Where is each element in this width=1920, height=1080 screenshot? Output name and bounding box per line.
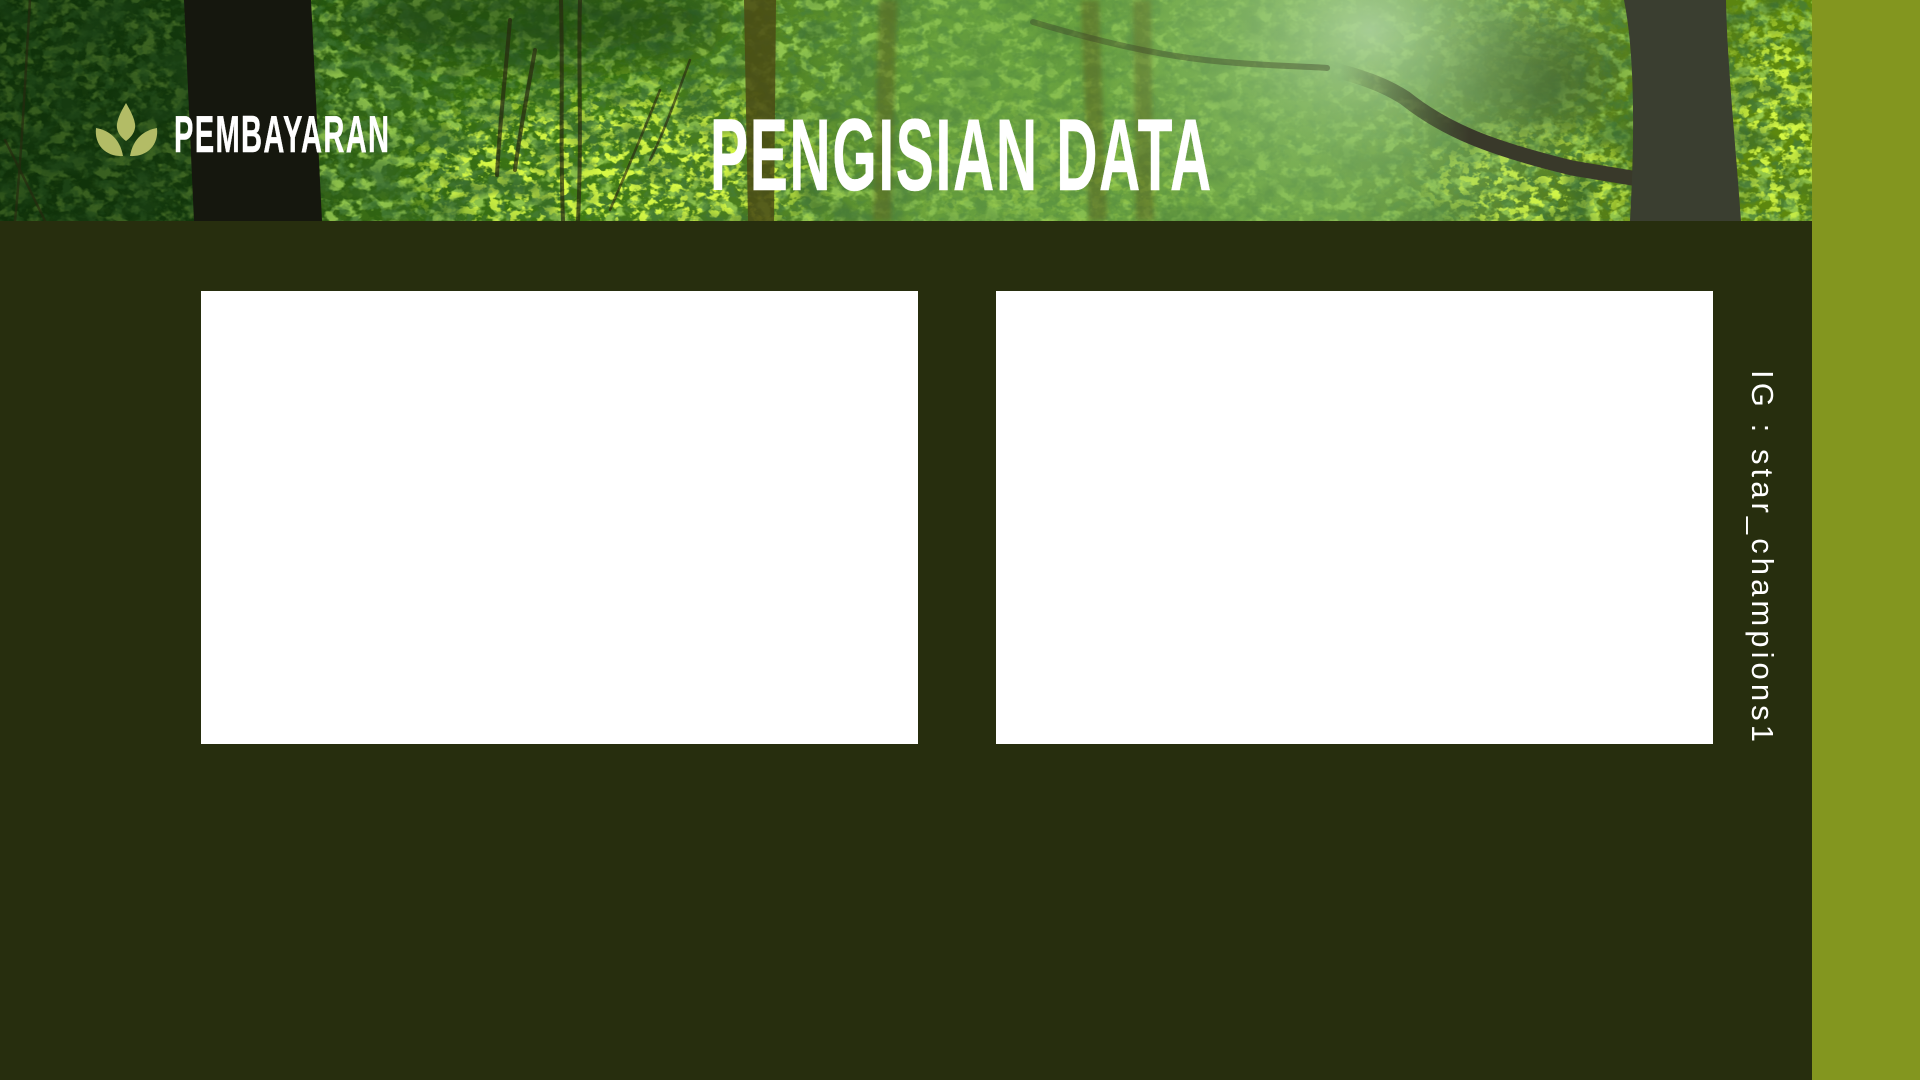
shaded left foliage: [0, 0, 340, 221]
leaf shadows: [0, 0, 1812, 221]
sunlight haze: [1080, 0, 1660, 270]
shaded right canopy: [1430, 25, 1610, 125]
hazy overlay over centre: [760, 0, 1540, 221]
panel: right white box: [996, 291, 1713, 744]
thin tree trunks and branches: [5, 0, 690, 221]
leaf texture mid: [0, 0, 1812, 221]
title: pengisian data: PENGISIAN DATA: [710, 97, 1211, 212]
tree trunk: centre: [744, 0, 776, 221]
panel: left white box: [201, 291, 918, 744]
heading: pembayaran: PEMBAYARAN: [174, 105, 389, 163]
leaf texture bright: [312, 0, 1812, 221]
tree branch: [1033, 22, 1632, 178]
icon: leaves: [96, 103, 157, 156]
tree trunk: left dark: [184, 0, 322, 221]
tree trunk: right: [1624, 0, 1741, 221]
leaf texture dark: [0, 0, 1812, 221]
sidebar: olive strip: [1812, 0, 1920, 1080]
forest base colour: [0, 0, 1812, 221]
banner: forest photo with titles: [0, 0, 1812, 221]
shaded upper canopy: [330, 0, 730, 65]
hazy distant trunks: [882, 0, 1145, 221]
vertical handle text: IG : star_champions1: [1745, 370, 1780, 742]
